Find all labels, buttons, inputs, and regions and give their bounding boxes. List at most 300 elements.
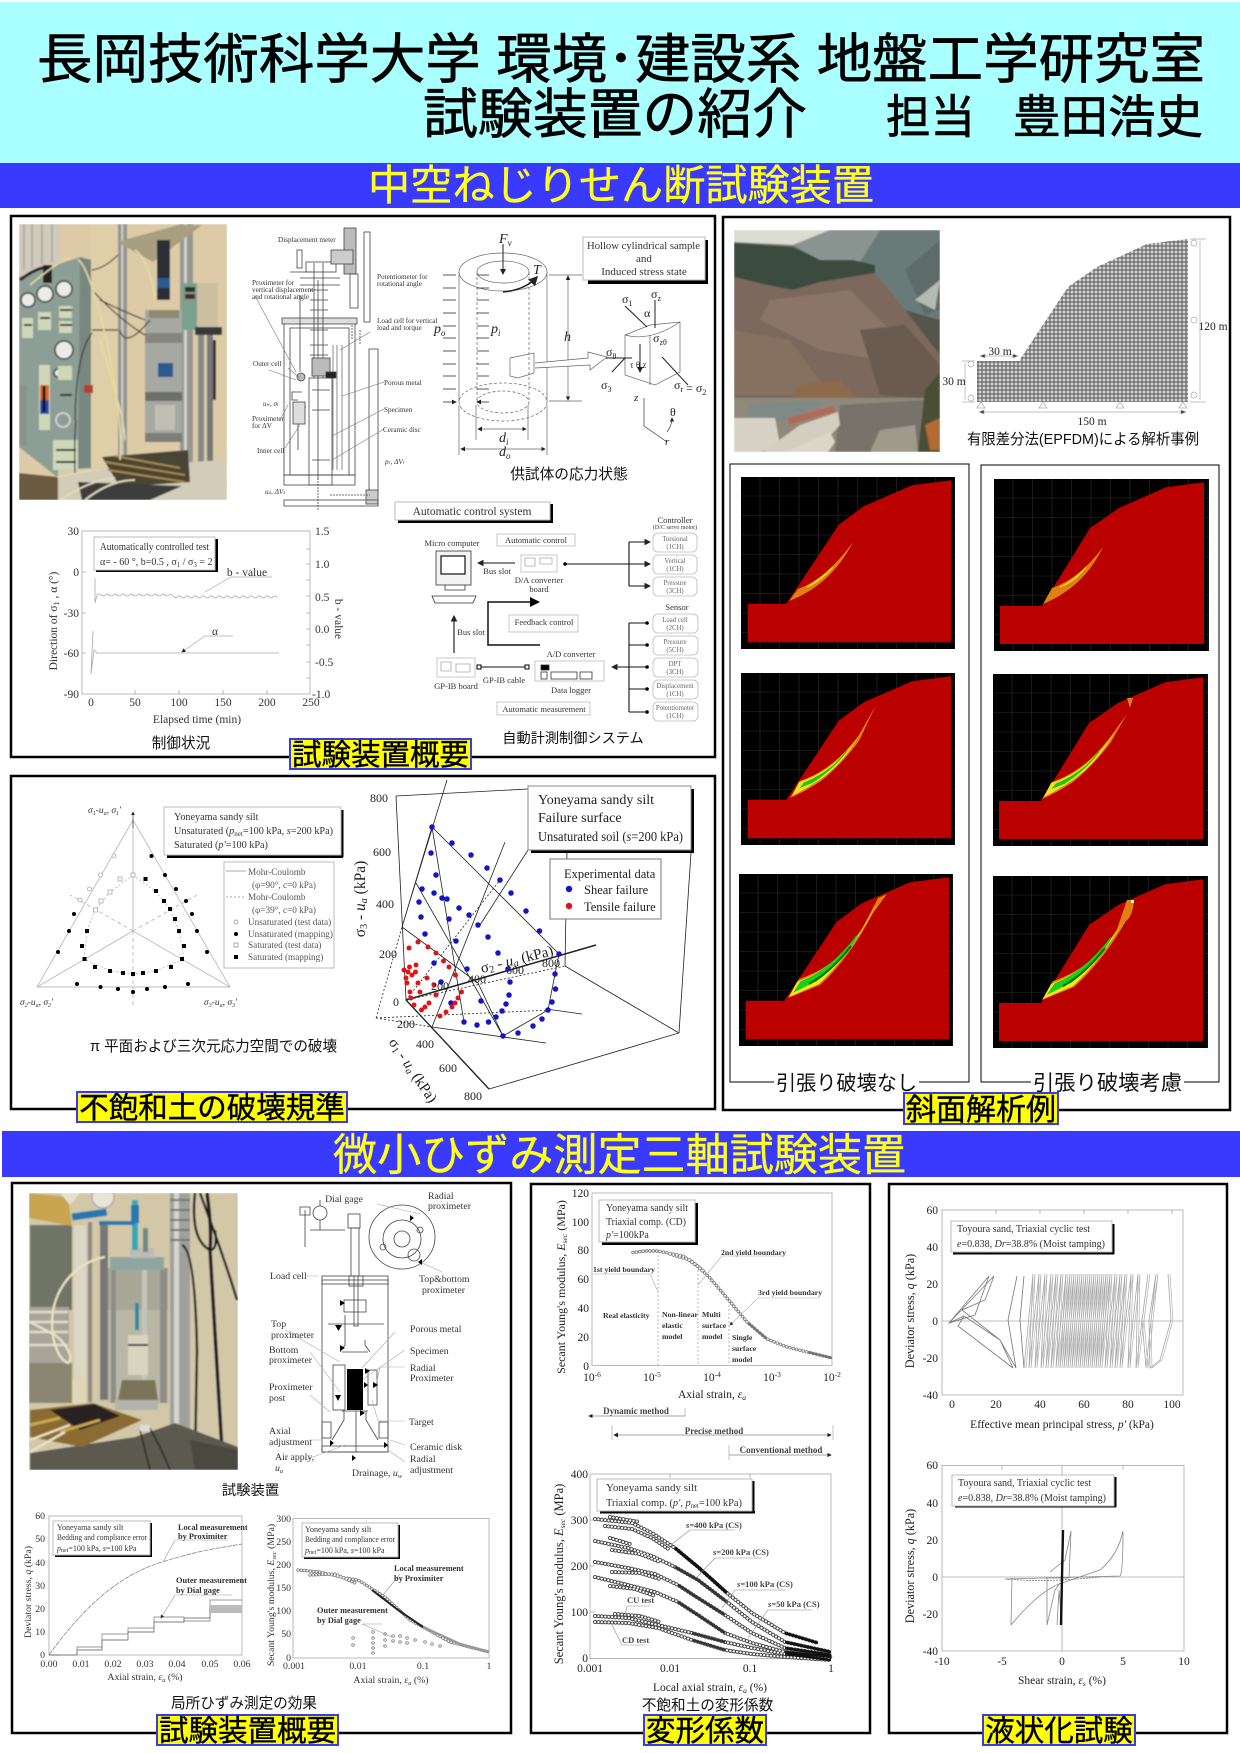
diagram: hollow cylinder stress state: 1: [628, 299, 632, 308]
chart: deviator stress vs axial strain: 0: [40, 1650, 45, 1661]
panel: slope analysis: [723, 217, 1230, 1127]
chart: yield boundaries: [554, 1188, 841, 1402]
schematic labels: proximeter: [271, 1330, 315, 1341]
schematic labels: Dial gage: [325, 1194, 364, 1205]
chart: finite difference mesh: 30 m: [942, 376, 966, 388]
chart: q vs effective mean principal stress: Deviator stress, q (kPa): [903, 1254, 917, 1368]
chart: 3D failure surface: (kPa): [406, 1067, 440, 1106]
chart: 3D failure surface: 1: [389, 1046, 401, 1056]
legend: experimental data: Experimental data: [564, 867, 656, 881]
chart: pi plane: a: [36, 1003, 39, 1009]
legend: pi plane: Unsaturated (test data): [248, 917, 331, 927]
chart: q vs effective mean principal stress: 60: [1078, 1399, 1090, 1411]
chart: secant modulus, bedding error: Outer measurement: [317, 1606, 388, 1615]
diagram: hollow cylinder stress state: zθ: [659, 338, 667, 347]
chart: yield boundaries: 1st yield boundary: [593, 1265, 655, 1274]
diagram: hollow cylinder stress state: σ: [601, 378, 607, 392]
callout: hollow cylindrical sample: Hollow cylindrical sample: [587, 240, 700, 252]
legend: pi plane: Unsaturated (mapping): [248, 929, 333, 939]
diagram: automatic measurement and control system: DPT: [669, 661, 682, 668]
chart: control status: 1.0: [315, 559, 330, 571]
section heading: small strain triaxial apparatus: 微小ひずみ測定三軸試験装置: [333, 1131, 906, 1180]
chart: finite difference mesh: 30 m: [988, 346, 1012, 358]
schematic labels: u: [275, 1463, 280, 1474]
diagram: automatic measurement and control system: Bus slot: [483, 566, 511, 576]
callout: Yoneyama sandy silt: net: [234, 830, 243, 838]
chart: control status: 0: [88, 697, 94, 709]
chart: q vs effective mean principal stress: Effective mean principal stress, p' (kPa): [970, 1419, 1154, 1431]
schematic labels: proximeter: [269, 1355, 313, 1366]
schematic labels: Ceramic disk: [410, 1442, 462, 1453]
chart: 3D failure surface: 600: [373, 845, 391, 859]
chart: modulus for suctions: 0: [582, 1653, 588, 1665]
legend: pi plane: (φ=39°, c=0 kPa): [252, 905, 316, 915]
title line 2: [423, 85, 1203, 145]
diagram: hollow cylinder stress state: θ: [670, 405, 676, 419]
diagram: automatic measurement and control system: Automatic measurement: [502, 704, 586, 714]
chart: 3D failure surface: 800: [464, 1089, 482, 1103]
diagram: hollow cylinder stress state: σ: [674, 378, 680, 392]
chart: yield boundaries: surface: [732, 1344, 757, 1353]
chart: secant modulus, bedding error: sec: [271, 1551, 278, 1560]
chart: q vs effective mean principal stress: -20: [923, 1353, 938, 1365]
legend: experimental data: [550, 859, 661, 919]
chart: q vs effective mean principal stress: 100: [1163, 1399, 1181, 1411]
chart: modulus for suctions: sec: [558, 1518, 567, 1528]
legend: pi plane: (φ=90°, c=0 kPa): [252, 880, 316, 890]
schematic labels: Target: [409, 1417, 434, 1428]
chart: q vs shear strain: 0: [1059, 1656, 1065, 1668]
chart: finite difference mesh: 150 m: [1077, 416, 1107, 428]
chart: deviator stress vs axial strain: Outer measurement: [176, 1576, 247, 1585]
schematic labels: Axial: [269, 1426, 291, 1437]
chart: deviator stress vs axial strain: (%): [165, 1672, 183, 1683]
chart: modulus for suctions: 100: [571, 1607, 588, 1619]
callout: automatic control system: [395, 502, 553, 523]
chart: secant modulus, bedding error: 50: [281, 1629, 291, 1640]
chart: secant modulus, bedding error: 300: [276, 1514, 291, 1525]
chart: q vs effective mean principal stress: 20: [990, 1399, 1002, 1411]
diagram: hollow cylinder stress state: = σ: [686, 381, 702, 395]
diagram: automatic measurement and control system: Automatic control: [505, 535, 568, 545]
schematic labels: rotational angle: [377, 280, 422, 288]
schematic labels: a: [280, 1468, 283, 1475]
chart: control status: 0.5: [315, 592, 330, 604]
panel: failure criterion of unsaturated soil: [11, 776, 715, 1125]
chart: pi plane: ': [235, 998, 238, 1008]
chart: 3D failure surface: σ: [479, 959, 491, 977]
chart: modulus for suctions: Yoneyama sandy silt: [606, 1482, 697, 1494]
schematic labels: proximeter: [428, 1201, 472, 1212]
diagram: automatic measurement and control system: Feedback control: [515, 617, 574, 627]
chart: modulus for suctions: 0.001: [577, 1663, 603, 1675]
schematic labels: and rotational angle: [252, 293, 309, 301]
callout: Yoneyama sandy silt: Unsaturated (p: [174, 826, 234, 837]
diagram: hollow cylinder stress state: i: [506, 437, 509, 447]
schematic labels: Outer cell: [253, 360, 282, 368]
section heading: hollow torsion shear apparatus: [0, 162, 1240, 209]
diagram: automatic measurement and control system: Controller: [658, 515, 693, 525]
schematic labels: Proximeter: [410, 1373, 454, 1384]
chart: q vs effective mean principal stress: [903, 1205, 1183, 1431]
diagram: automatic measurement and control system: Torsional: [662, 536, 688, 543]
chart: yield boundaries: (MPa): [554, 1200, 568, 1234]
chart: 3D failure surface: 200: [431, 979, 449, 993]
chart: q vs shear strain: Toyoura sand, Triaxial cyclic test: [958, 1478, 1091, 1489]
chart: 3D failure surface: a: [403, 1066, 414, 1077]
chart: deviator stress vs axial strain: s=100 kPa: [103, 1544, 136, 1553]
diagram: hollow cylinder stress state: h: [564, 330, 571, 345]
schematic labels: Load cell: [270, 1271, 307, 1282]
chart: deviator stress vs axial strain: 0.00: [40, 1659, 58, 1670]
chart: slope L3: [739, 874, 953, 1046]
chart: modulus for suctions: 0.01: [660, 1663, 680, 1675]
diagram: automatic measurement and control system: (1CH): [666, 713, 684, 720]
chart: 3D failure surface: a: [359, 898, 370, 903]
schematic labels: [252, 236, 437, 496]
schematic labels: adjustment: [269, 1437, 312, 1448]
chart: secant modulus, bedding error: 0: [286, 1653, 291, 1664]
callout: Yoneyama sandy silt: Saturated (p'=100 kPa): [174, 840, 268, 851]
chart: modulus for suctions: CU test: [627, 1595, 654, 1605]
callout: Yoneyama sandy silt: Yoneyama sandy silt: [174, 812, 259, 823]
diagram: automatic measurement and control system: (2CH): [666, 625, 684, 632]
chart: q vs shear strain: 10: [1178, 1656, 1190, 1668]
diagram: automatic measurement and control system: Displacement: [656, 683, 694, 690]
chart: modulus for suctions: 200: [571, 1561, 588, 1573]
chart: control status: -60: [64, 648, 79, 660]
chart: 3D failure surface: 800: [542, 956, 560, 970]
chart: 3D failure surface: (kPa): [352, 861, 369, 898]
chart: control status: 50: [129, 697, 141, 709]
chart: control status: 100: [170, 697, 188, 709]
chart: control status: b - value: [227, 567, 267, 579]
diagram: hollow cylinder stress state: α: [644, 306, 651, 320]
chart: secant modulus, bedding error: p: [304, 1546, 309, 1555]
chart: 3D failure surface: 400: [416, 1037, 434, 1051]
chart: q vs effective mean principal stress: -40: [923, 1390, 938, 1402]
legend: pi plane: [224, 862, 334, 968]
chart: control status: b - value: [332, 599, 344, 639]
label: no tensile failure: 引張り破壊なし: [776, 1072, 917, 1095]
chart: secant modulus, bedding error: s=100 kPa: [351, 1546, 384, 1555]
schematic labels: Radial: [428, 1191, 454, 1202]
chart: q vs shear strain: 40: [926, 1498, 938, 1510]
schematic labels: Proximeter: [269, 1382, 313, 1393]
diagram: automatic measurement and control system: board: [529, 584, 549, 594]
chart: secant modulus, bedding error: (%): [411, 1675, 429, 1686]
chart: control status: 0: [73, 567, 79, 579]
chart: pi plane: ': [119, 806, 122, 816]
schematic labels: Proximeter for: [252, 279, 295, 287]
chart: yield boundaries: Yoneyama sandy silt: [606, 1203, 688, 1214]
callout: automatic control system: Automatic control system: [413, 506, 531, 518]
diagram: hollow cylinder stress state: v: [508, 238, 512, 248]
chart: slope R3: [993, 876, 1208, 1048]
chart: control status: Elapsed time (min): [153, 714, 241, 726]
diagram: automatic measurement and control system: A/D converter: [547, 649, 596, 659]
schematic labels: Top: [271, 1319, 286, 1330]
chart: yield boundaries: 120: [572, 1188, 589, 1200]
chart: q vs effective mean principal stress: 0: [932, 1316, 938, 1328]
chart: modulus for suctions: 300: [571, 1515, 588, 1527]
chart: 3D failure surface: 200: [379, 947, 397, 961]
chart: deviator stress vs axial strain: 0.03: [136, 1659, 154, 1670]
chart: modulus for suctions: Local axial strain, ε: [653, 1682, 743, 1694]
diagram: hollow cylinder stress state: σ: [651, 287, 657, 301]
caption: effect of local strain measurement: 局所ひずみ測定の効果: [171, 1695, 317, 1712]
schematic labels: load and torque: [377, 324, 422, 332]
chart: q vs shear strain: -20: [923, 1609, 938, 1621]
legend: pi plane: Saturated (mapping): [248, 952, 323, 962]
diagram: automatic measurement and control system: Vertical: [664, 558, 686, 565]
schematic labels: Porous metal: [410, 1324, 462, 1335]
schematic labels: adjustment: [410, 1465, 453, 1476]
chart: modulus for suctions: s=200 kPa (CS): [712, 1547, 769, 1557]
chart: pi plane: -u: [96, 806, 104, 816]
diagram: hollow cylinder stress state: 3: [607, 385, 611, 394]
diagram: hollow cylinder stress state: F: [499, 232, 508, 247]
callout: Yoneyama sandy silt: =100 kPa,: [243, 826, 287, 837]
chart: pi plane: , σ: [223, 998, 232, 1008]
chart: control status: = 2: [197, 557, 213, 568]
chart: modulus for suctions: s=400 kPa (CS): [685, 1520, 742, 1530]
schematic labels: post: [269, 1393, 286, 1404]
chart: deviator stress vs axial strain: =100 kPa,: [68, 1544, 103, 1553]
chart: 3D failure surface: -: [392, 1046, 412, 1066]
schematic labels: for ΔV: [252, 422, 273, 430]
chart: control status: 200: [258, 697, 276, 709]
chart: 3D failure surface: 400: [376, 897, 394, 911]
chart: secant modulus, bedding error: by Proximiter: [394, 1574, 444, 1583]
chart: slope L2: [741, 673, 955, 845]
photo: landslide: [734, 230, 940, 452]
chart: pi plane: 1: [116, 811, 119, 817]
schematic labels: Specimen: [410, 1346, 449, 1357]
diagram: automatic measurement and control system: GP-IB cable: [483, 675, 525, 685]
chart: yield boundaries: 0: [583, 1361, 589, 1373]
chart: q vs shear strain: -5: [997, 1656, 1007, 1668]
chart: yield boundaries: -4: [715, 1370, 721, 1379]
label: deformation modulus: 変形係数: [646, 1715, 764, 1748]
callout: hollow cylindrical sample: [583, 237, 708, 284]
diagram: measurement method ranges: [589, 1406, 833, 1460]
chart: q vs effective mean principal stress: 80: [1122, 1399, 1134, 1411]
chart: modulus for suctions: [552, 1469, 834, 1695]
chart: modulus for suctions: =100 kPa): [699, 1497, 742, 1509]
chart: deviator stress vs axial strain: net: [61, 1548, 69, 1554]
panel: apparatus overview: [11, 216, 715, 772]
chart: pi plane: 2: [25, 1003, 28, 1009]
diagram: automatic measurement and control system: Bus slot: [457, 627, 485, 637]
label: slope analysis example: 斜面解析例: [906, 1094, 1056, 1127]
chart: yield boundaries: model: [732, 1355, 753, 1364]
diagram: hollow cylinder stress state: σ: [606, 345, 612, 359]
schematic labels: Top&bottom: [419, 1274, 470, 1285]
chart: 3D failure surface: a: [513, 958, 520, 970]
chart: pi plane: -u: [212, 998, 220, 1008]
chart: secant modulus, bedding error: 250: [276, 1537, 291, 1548]
chart: modulus for suctions: Triaxial comp. (p', p: [606, 1497, 691, 1509]
callout: failure surface: Unsaturated soil (s=200 kPa): [538, 830, 683, 845]
chart: deviator stress vs axial strain: Yoneyama sandy silt: [57, 1523, 124, 1532]
schematic labels: Porous metal: [384, 379, 422, 387]
chart: q vs effective mean principal stress: 40: [1034, 1399, 1046, 1411]
chart: secant modulus, bedding error: 0.1: [417, 1661, 429, 1672]
label: triaxial apparatus overview: 試験装置概要: [159, 1715, 336, 1748]
chart: slope R1: [994, 479, 1209, 651]
chart: yield boundaries: 40: [578, 1303, 589, 1315]
chart: q vs shear strain: -40: [923, 1646, 938, 1658]
diagram: hollow cylinder stress state: o: [506, 451, 511, 461]
chart: secant modulus, bedding error: Secant Young's modulus, E: [266, 1560, 277, 1666]
title line 1: 長岡技術科学大学 環境･建設系 地盤工学研究室: [37, 30, 1205, 90]
schematic labels: pr, ΔVr: [384, 458, 405, 466]
chart: control status: 3: [193, 561, 197, 569]
chart: q vs effective mean principal stress: e=0.838, Dr=38.8% (Moist tamping): [957, 1239, 1105, 1250]
diagram: hollow cylinder stress state: d: [499, 431, 506, 446]
schematic labels: Displacement meter: [278, 236, 336, 244]
chart: deviator stress vs axial strain: [23, 1511, 251, 1684]
chart: pi plane: σ: [204, 998, 209, 1008]
chart: yield boundaries: 100: [572, 1217, 589, 1229]
chart: deviator stress vs axial strain: 0.02: [104, 1659, 122, 1670]
chart: q vs shear strain: (%): [1086, 1675, 1106, 1687]
label: tensile failure considered: 引張り破壊考慮: [1033, 1072, 1182, 1095]
legend: experimental data: Tensile failure: [584, 900, 656, 914]
schematic labels: Drainage, u: [352, 1468, 398, 1479]
chart: pi plane: a: [104, 811, 107, 817]
chart: secant modulus, bedding error: 1: [487, 1661, 492, 1672]
panel: triaxial apparatus overview: [12, 1183, 511, 1748]
chart: pi plane: σ: [88, 806, 93, 816]
callout: failure surface: Failure surface: [538, 811, 622, 826]
chart: pi plane: 3: [208, 1003, 212, 1009]
chart: modulus for suctions: CD test: [622, 1635, 649, 1645]
schematic labels: vertical displacement: [252, 286, 313, 294]
chart: 3D failure surface: -: [492, 955, 508, 974]
chart: control status: [48, 526, 344, 726]
section heading: small strain triaxial apparatus: [2, 1131, 1240, 1180]
caption: pi plane and 3D stress space: π 平面および三次元応力空間での破壊: [90, 1038, 337, 1055]
section heading: hollow torsion shear apparatus: 中空ねじりせん断試験装置: [368, 162, 874, 209]
diagram: hollow cylinder stress state: 2: [702, 388, 706, 397]
title line 2: 豊田浩史: [1013, 91, 1203, 143]
legend: pi plane: Mohr-Coulomb: [248, 867, 306, 877]
chart: control status: -1.0: [312, 689, 330, 701]
chart: 3D failure surface: 600: [439, 1061, 457, 1075]
diagram: automatic measurement and control system: (D/C servo motor): [653, 524, 697, 531]
diagram: hollow cylinder stress state: r: [665, 436, 670, 448]
schematic labels: Potentiometer for: [377, 273, 428, 281]
chart: control status: α: [212, 626, 218, 638]
chart: control status: 1: [52, 601, 61, 605]
header band: [0, 2, 1240, 163]
chart: yield boundaries: model: [662, 1332, 683, 1341]
chart: pi plane: , σ: [39, 998, 48, 1008]
chart: yield boundaries: 80: [578, 1245, 589, 1257]
chart: yield boundaries: Real elasticity: [603, 1311, 650, 1320]
chart: deviator stress vs axial strain: 30: [35, 1581, 45, 1592]
chart: pi plane: [20, 806, 238, 1009]
schematic labels: Load cell for vertical: [377, 317, 437, 325]
chart: pi plane: a: [220, 1003, 223, 1009]
chart: yield boundaries: 10: [643, 1372, 655, 1384]
diagram: automatic measurement and control system: Data logger: [551, 685, 591, 695]
chart: control status: 150: [214, 697, 232, 709]
schematic labels: proximeter: [422, 1285, 466, 1296]
chart: control status: 250: [302, 697, 320, 709]
chart: deviator stress vs axial strain: by Proximiter: [178, 1532, 228, 1541]
chart: yield boundaries: -3: [775, 1370, 781, 1379]
title line 2: 試験装置の紹介: [423, 85, 807, 145]
chart: deviator stress vs axial strain: 10: [35, 1627, 45, 1638]
diagram: automatic measurement and control system: (1CH): [666, 544, 684, 551]
chart: secant modulus, bedding error: 150: [276, 1583, 291, 1594]
chart: deviator stress vs axial strain: 0.04: [168, 1659, 186, 1670]
caption: deformation modulus of unsaturated soil: 不飽和土の変形係数: [642, 1697, 774, 1714]
chart: modulus for suctions: 400: [571, 1469, 588, 1481]
chart: q vs effective mean principal stress: 40: [926, 1242, 938, 1254]
chart: 3D failure surface: σ: [385, 1035, 403, 1051]
chart: q vs effective mean principal stress: 20: [926, 1279, 938, 1291]
chart: 3D failure surface: 3: [359, 924, 370, 929]
chart: secant modulus, bedding error: 0.01: [349, 1661, 367, 1672]
chart: secant modulus, bedding error: (MPa): [266, 1524, 277, 1551]
chart: q vs shear strain: [903, 1460, 1190, 1688]
diagram: measurement method ranges: Dynamic method: [603, 1406, 669, 1416]
caption: apparatus: 試験装置: [222, 1482, 279, 1499]
chart: deviator stress vs axial strain: 60: [35, 1511, 45, 1522]
caption: automatic control: 自動計測制御システム: [502, 731, 644, 747]
diagram: automatic measurement and control system: D/A converter: [515, 575, 563, 585]
chart: yield boundaries: elastic: [662, 1321, 683, 1330]
chart: 3D failure surface: u: [352, 903, 369, 911]
chart: q vs shear strain: 60: [926, 1460, 938, 1472]
diagram: automatic measurement and control system: (5CH): [666, 647, 684, 654]
chart: deviator stress vs axial strain: 20: [35, 1604, 45, 1615]
callout: failure surface: Yoneyama sandy silt: [538, 793, 654, 808]
chart: yield boundaries: Secant Young's modulus, E: [554, 1243, 568, 1374]
chart: deviator stress vs axial strain: p: [56, 1544, 61, 1553]
schematic labels: ua, ΔVs: [265, 488, 285, 496]
chart: deviator stress vs axial strain: 40: [35, 1558, 45, 1569]
schematic: triaxial cell: [285, 1200, 442, 1462]
schematic labels: w: [398, 1473, 403, 1480]
chart: yield boundaries: Triaxial comp. (CD): [606, 1217, 686, 1228]
chart: control status: -30: [64, 608, 79, 620]
panel: deformation modulus: [531, 1184, 870, 1748]
chart: 3D failure surface: 200: [397, 1017, 415, 1031]
diagram: hollow cylinder stress state: i: [498, 328, 501, 338]
schematic labels: uw, σt: [263, 400, 279, 408]
chart: q vs shear strain: s: [1083, 1679, 1086, 1688]
legend: experimental data: Shear failure: [584, 883, 649, 897]
chart: finite difference mesh: [942, 239, 1228, 428]
chart: q vs shear strain: 0: [932, 1572, 938, 1584]
caption: stress state: 供試体の応力状態: [510, 466, 628, 483]
diagram: hollow cylinder stress state: [433, 232, 706, 461]
chart: secant modulus, bedding error: 100: [276, 1606, 291, 1617]
chart: modulus for suctions: s=100 kPa (CS): [736, 1579, 793, 1589]
chart: secant modulus, bedding error: net: [309, 1550, 317, 1556]
chart: q vs effective mean principal stress: Toyoura sand, Triaxial cyclic test: [957, 1224, 1090, 1235]
chart: 3D failure surface: -: [352, 911, 369, 924]
chart: yield boundaries: 10: [763, 1372, 775, 1384]
diagram: automatic measurement and control system: (1CH): [666, 691, 684, 698]
diagram: automatic measurement and control system: Pressure: [663, 580, 687, 587]
chart: q vs effective mean principal stress: 0: [949, 1399, 955, 1411]
